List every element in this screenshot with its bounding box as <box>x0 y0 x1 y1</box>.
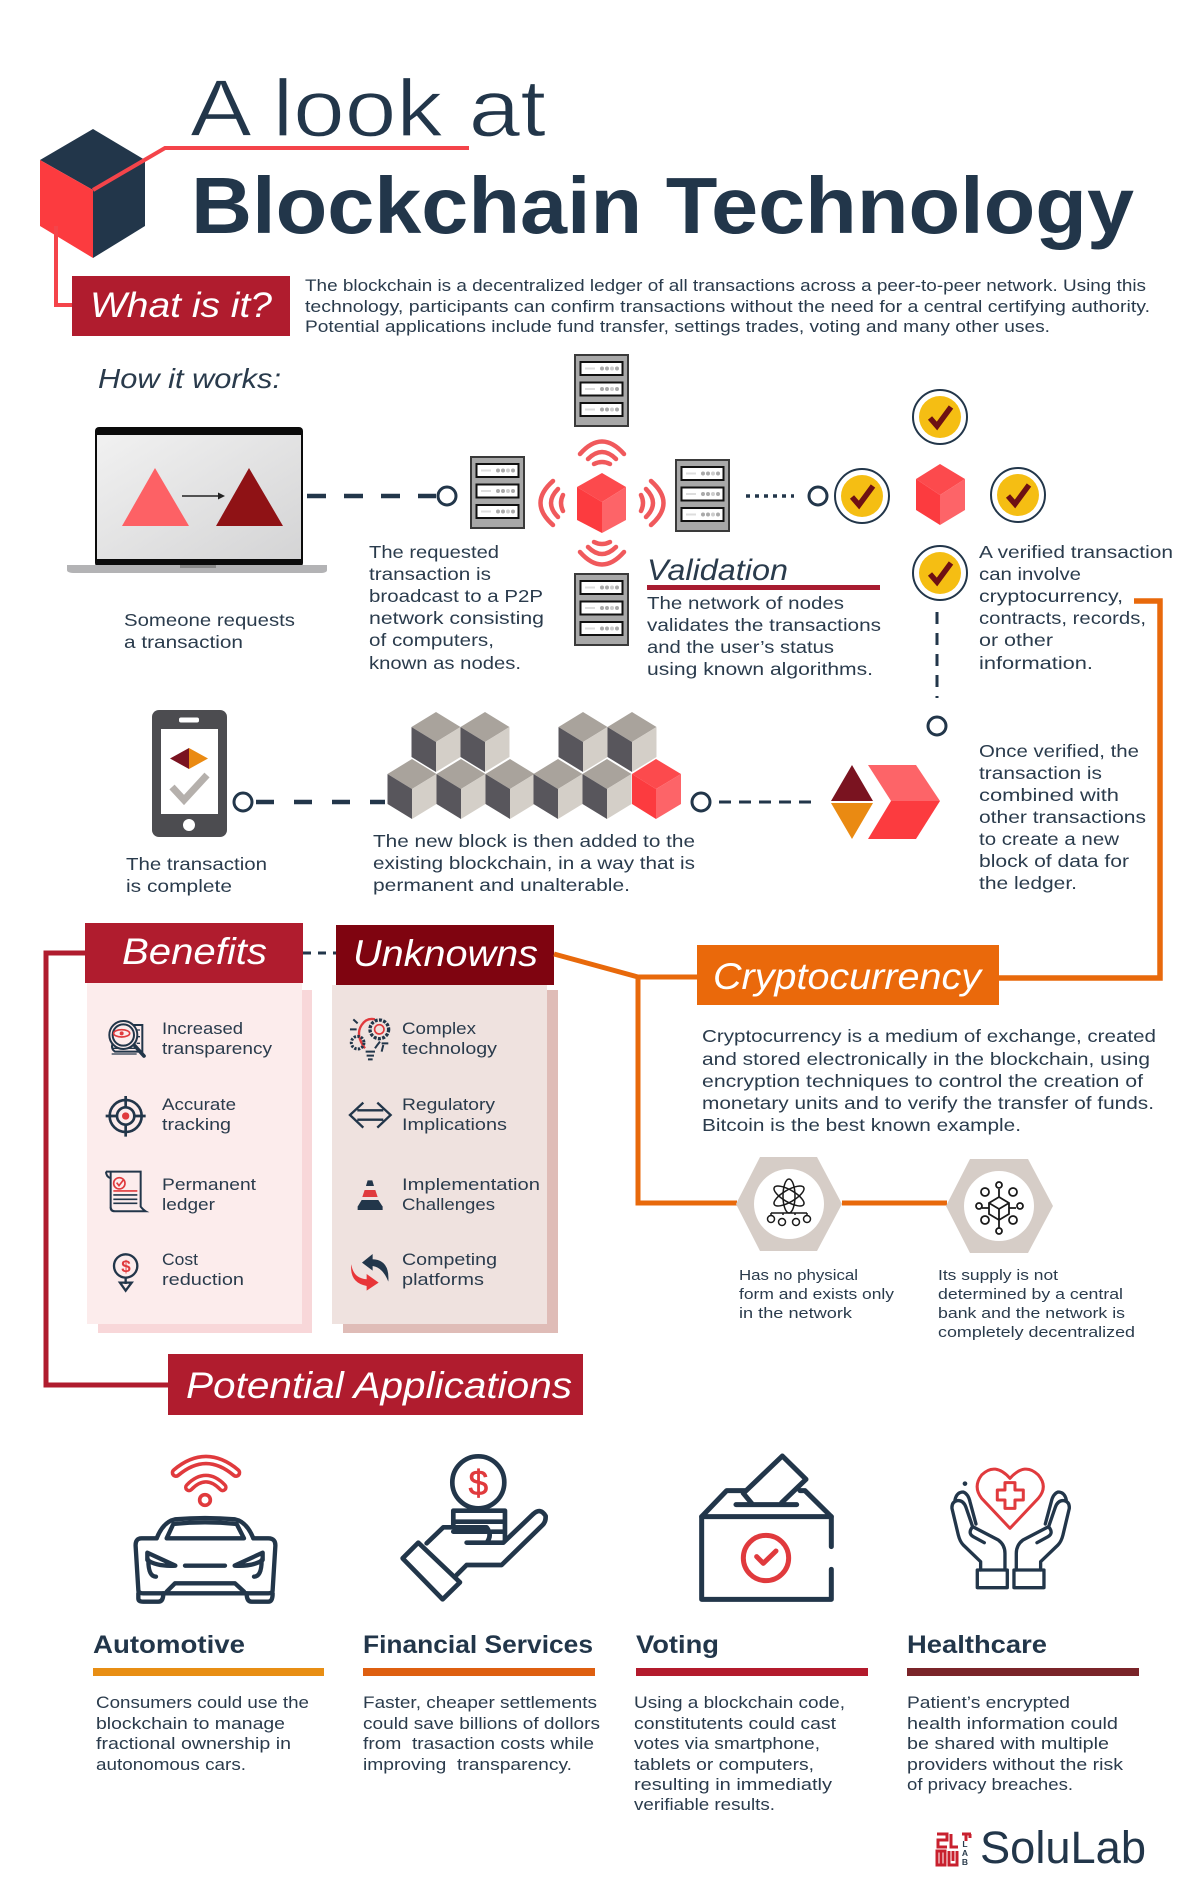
benefit: cost reduction: reduction <box>162 1270 244 1289</box>
panel: unknowns <box>332 925 558 1333</box>
benefit: accurate tracking: tracking <box>162 1115 231 1134</box>
text block: validation <box>647 593 881 679</box>
unknown: complex technology <box>350 1019 498 1059</box>
text block: cryptocurrency <box>702 1026 1156 1135</box>
icon: laptop <box>67 427 327 573</box>
heading: Validation <box>647 554 880 590</box>
application: voting: resulting in immediatly <box>634 1776 833 1794</box>
heading: Unknowns <box>336 925 554 985</box>
application: voting: Using a blockchain code, <box>634 1694 845 1712</box>
caption: supply decentralized: bank and the network is <box>938 1305 1125 1322</box>
caption: supply decentralized <box>938 1267 1135 1341</box>
text block: what is it description <box>305 277 1150 336</box>
application: automotive: autonomous cars. <box>96 1756 246 1774</box>
heading: Potential Applications: Potential Applications <box>186 1365 572 1406</box>
title <box>190 64 1135 250</box>
logo: SoluLab: A <box>962 1848 968 1858</box>
validation cluster icons <box>835 390 1045 600</box>
text block: requested transaction: of computers, <box>369 630 494 650</box>
icon: server top <box>575 355 628 426</box>
text block: new block: The new block is then added to the <box>373 831 695 851</box>
text block: once verified: transaction is <box>979 763 1102 783</box>
logo: SoluLab: L <box>962 1839 968 1849</box>
connector: orange line to cryptocurrency <box>999 601 1160 978</box>
text block: once verified: other transactions <box>979 807 1146 827</box>
heading: Cryptocurrency <box>697 945 999 1005</box>
application: voting: tablets or computers, <box>634 1756 814 1774</box>
text block: requested transaction: The requested <box>369 542 499 562</box>
application: healthcare: Patient’s encrypted <box>907 1694 1070 1712</box>
text block: what is it description: Potential applications include fund transfer, settings trades, voting and many other uses. <box>305 318 1050 336</box>
application: automotive <box>93 1631 324 1774</box>
application: voting: verifiable results. <box>634 1796 775 1814</box>
icon: hand with coin <box>403 1456 546 1599</box>
caption: no physical form: Has no physical <box>739 1267 858 1284</box>
icon: server right <box>676 460 729 531</box>
unknown: implementation challenges: Implementation <box>402 1175 540 1194</box>
text block: new block: permanent and unalterable. <box>373 875 630 895</box>
icon: hands holding heart <box>952 1469 1069 1588</box>
text block: transaction complete: The transaction <box>126 854 267 874</box>
title: A look at <box>190 64 546 154</box>
icon: car with wifi <box>136 1460 275 1602</box>
application: healthcare: of privacy breaches. <box>907 1776 1073 1794</box>
text block: once verified: combined with <box>979 785 1119 805</box>
application: automotive: fractional ownership in <box>96 1735 291 1753</box>
connector: blockchain to phone <box>234 793 385 811</box>
text block: requested transaction: broadcast to a P2P <box>369 586 543 606</box>
caption: no physical form: in the network <box>739 1305 853 1322</box>
application: voting: Voting <box>636 1631 719 1659</box>
text block: cryptocurrency: encryption techniques to control the creation of <box>702 1071 1143 1091</box>
benefit: accurate tracking <box>106 1095 236 1137</box>
application: financial services: Faster, cheaper settlements <box>363 1694 597 1712</box>
application: automotive: Consumers could use the <box>96 1694 309 1712</box>
icon: hexagon decentralized cube <box>946 1159 1053 1253</box>
benefit: permanent ledger: Permanent <box>162 1175 256 1194</box>
text block: requested transaction <box>369 542 544 673</box>
text block: once verified <box>979 741 1146 893</box>
text block: transaction complete <box>126 854 267 896</box>
heading: Cryptocurrency: Cryptocurrency <box>713 956 984 997</box>
heading: What is it?: What is it? <box>90 286 273 325</box>
unknown: complex technology: technology <box>402 1039 498 1058</box>
text block: cryptocurrency: monetary units and to verify the transfer of funds. <box>702 1093 1154 1113</box>
icon: central red cube <box>577 473 626 533</box>
connector: red line benefits to applications <box>46 953 168 1385</box>
application: financial services: from trasaction costs while <box>363 1735 594 1753</box>
unknown: competing platforms: platforms <box>402 1270 484 1289</box>
icon: phone <box>152 710 227 837</box>
application: healthcare <box>907 1631 1139 1794</box>
title: Blockchain Technology <box>191 161 1135 250</box>
benefit: accurate tracking: Accurate <box>162 1095 236 1114</box>
text block: someone requests <box>124 610 295 652</box>
unknown: complex technology: Complex <box>402 1019 477 1038</box>
text block: once verified: Once verified, the <box>979 741 1139 761</box>
benefit: permanent ledger: ledger <box>162 1195 215 1214</box>
connector: nodes to validation <box>746 487 827 505</box>
application: financial services: improving transparency. <box>363 1756 572 1774</box>
text block: new block: existing blockchain, in a way that is <box>373 853 695 873</box>
text block: verified transaction: information. <box>979 653 1093 673</box>
connector: chevrons to blockchain <box>692 793 818 811</box>
text block: verified transaction: cryptocurrency, <box>979 586 1123 606</box>
icon: title cube with connector <box>40 129 469 305</box>
text block: validation: using known algorithms. <box>647 659 873 679</box>
caption: no physical form <box>739 1267 895 1322</box>
application: healthcare: be shared with multiple <box>907 1735 1109 1753</box>
icon: new block chevrons <box>831 765 940 839</box>
text block: new block <box>373 831 695 895</box>
text block: cryptocurrency: and stored electronically in the blockchain, using <box>702 1049 1150 1069</box>
heading: Validation: Validation <box>647 554 788 587</box>
icon: check top <box>913 390 967 444</box>
caption: no physical form: form and exists only <box>739 1286 895 1303</box>
unknown: competing platforms <box>351 1250 497 1291</box>
unknown: competing platforms: Competing <box>402 1250 497 1269</box>
benefit: permanent ledger <box>106 1172 256 1214</box>
connector: laptop to nodes <box>307 487 456 505</box>
icon: hexagon atom network <box>736 1157 842 1251</box>
application: voting: votes via smartphone, <box>634 1735 820 1753</box>
text block: someone requests: a transaction <box>124 632 243 652</box>
text block: requested transaction: network consisting <box>369 608 544 628</box>
text block: verified transaction: or other <box>979 630 1053 650</box>
nodes network diagram <box>471 355 729 645</box>
text block: requested transaction: transaction is <box>369 564 491 584</box>
application: healthcare: health information could <box>907 1715 1118 1733</box>
heading: Potential Applications <box>168 1354 583 1415</box>
benefit: increased transparency: transparency <box>162 1039 273 1058</box>
application: financial services <box>363 1631 600 1774</box>
icon: validation cube <box>916 464 965 525</box>
heading: Benefits: Benefits <box>122 931 267 972</box>
text block: what is it description: The blockchain is a decentralized ledger of all transactions across a peer-to-peer network. Using this <box>305 277 1146 295</box>
benefit: cost reduction: $ <box>121 1257 131 1276</box>
connector: unknowns to cryptocurrency <box>554 954 947 1203</box>
logo: SoluLab: B <box>962 1857 968 1867</box>
icon: hand with coin: $ <box>469 1464 488 1503</box>
heading: How it works: How it works: <box>98 363 281 394</box>
text block: verified transaction: contracts, records, <box>979 608 1146 628</box>
application: automotive: Automotive <box>93 1631 245 1659</box>
text block: verified transaction: A verified transaction <box>979 542 1173 562</box>
caption: supply decentralized: completely decentralized <box>938 1324 1135 1341</box>
text block: transaction complete: is complete <box>126 876 232 896</box>
unknown: regulatory implications: Implications <box>402 1115 507 1134</box>
text block: requested transaction: known as nodes. <box>369 653 521 673</box>
text block: once verified: the ledger. <box>979 873 1077 893</box>
connector: benefits to unknowns <box>303 952 336 954</box>
text block: once verified: block of data for <box>979 851 1129 871</box>
unknown: implementation challenges <box>358 1175 540 1214</box>
icon: check right <box>991 468 1045 522</box>
application: healthcare: Healthcare <box>907 1631 1047 1659</box>
benefit: increased transparency <box>109 1019 273 1058</box>
unknown: implementation challenges: Challenges <box>402 1195 495 1214</box>
application: financial services: could save billions of dollors <box>363 1715 600 1733</box>
logo: SoluLab: SoluLab <box>980 1822 1146 1873</box>
icon: check bottom <box>913 546 967 600</box>
benefit: increased transparency: Increased <box>162 1019 243 1038</box>
text block: what is it description: technology, participants can confirm transactions without the need for a central certifying authority. <box>305 298 1150 316</box>
icon: ballot box <box>702 1456 831 1599</box>
benefit: cost reduction: Cost <box>162 1250 198 1269</box>
text block: verified transaction <box>979 542 1173 673</box>
benefit: cost reduction <box>114 1250 244 1291</box>
panel: benefits <box>85 923 312 1333</box>
heading: Unknowns: Unknowns <box>353 933 538 974</box>
application: financial services: Financial Services <box>363 1631 593 1659</box>
icon: server left <box>471 457 524 528</box>
text block: once verified: to create a new <box>979 829 1119 849</box>
icon: broadcast waves <box>540 442 664 564</box>
heading: What is it? <box>72 276 290 336</box>
icon: blockchain cubes <box>388 712 681 819</box>
caption: supply decentralized: Its supply is not <box>938 1267 1059 1284</box>
caption: supply decentralized: determined by a central <box>938 1286 1123 1303</box>
text block: someone requests: Someone requests <box>124 610 295 630</box>
icon: check left <box>835 469 889 523</box>
application: voting: constitutents could cast <box>634 1715 836 1733</box>
icon: server bottom <box>575 574 628 645</box>
application: automotive: blockchain to manage <box>96 1715 285 1733</box>
text block: cryptocurrency: Bitcoin is the best known example. <box>702 1115 1021 1135</box>
text block: validation: validates the transactions <box>647 615 881 635</box>
text block: cryptocurrency: Cryptocurrency is a medium of exchange, created <box>702 1026 1156 1046</box>
text block: verified transaction: can involve <box>979 564 1081 584</box>
unknown: regulatory implications <box>350 1095 507 1134</box>
text block: validation: The network of nodes <box>647 593 844 613</box>
heading: Benefits <box>85 923 303 983</box>
application: voting <box>634 1631 868 1814</box>
unknown: regulatory implications: Regulatory <box>402 1095 496 1114</box>
text block: validation: and the user’s status <box>647 637 834 657</box>
connector: validation down to new block <box>928 612 946 735</box>
application: healthcare: providers without the risk <box>907 1756 1124 1774</box>
